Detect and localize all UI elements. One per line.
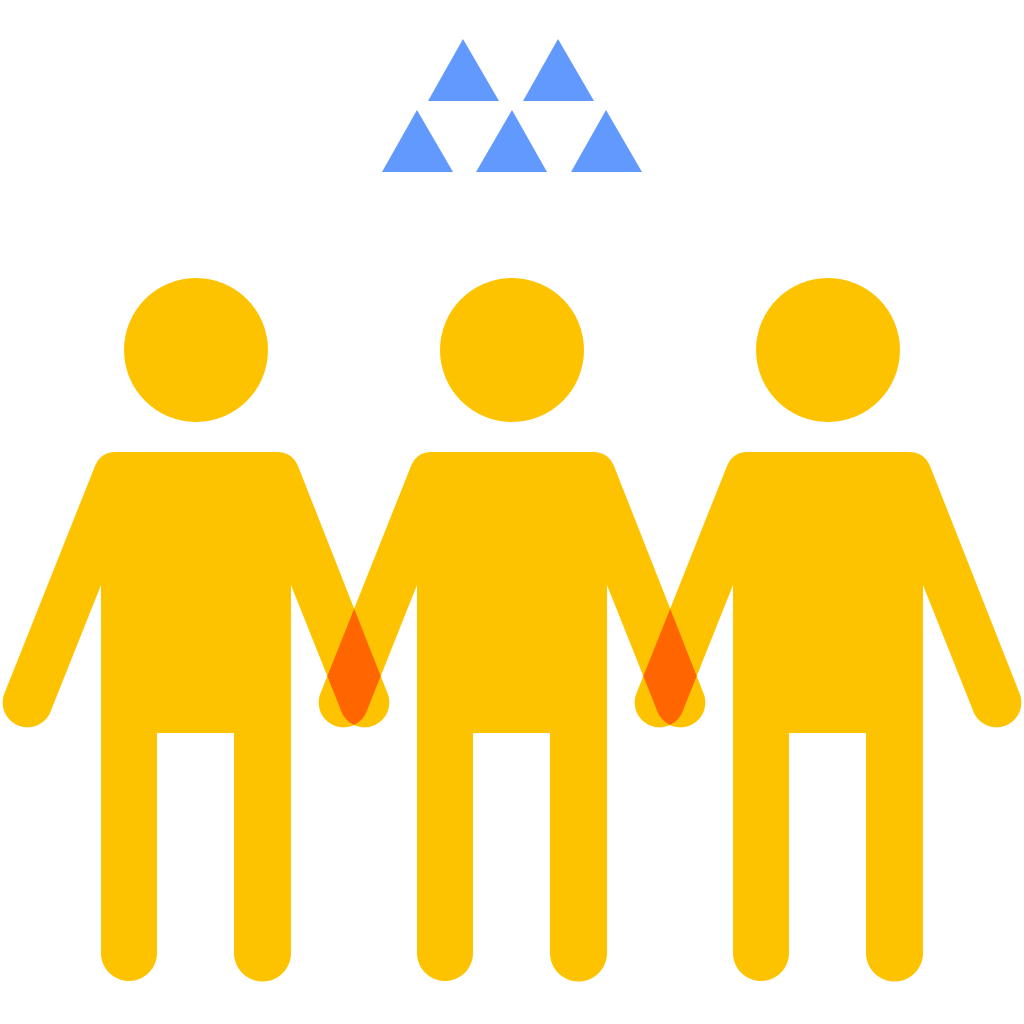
hand overlaps xyxy=(327,608,697,725)
figures: three people holding hands xyxy=(3,278,1021,982)
person 1 xyxy=(3,278,389,982)
person 3 xyxy=(635,278,1021,982)
icon: triangle cluster xyxy=(382,39,642,172)
person 2 xyxy=(319,278,705,982)
